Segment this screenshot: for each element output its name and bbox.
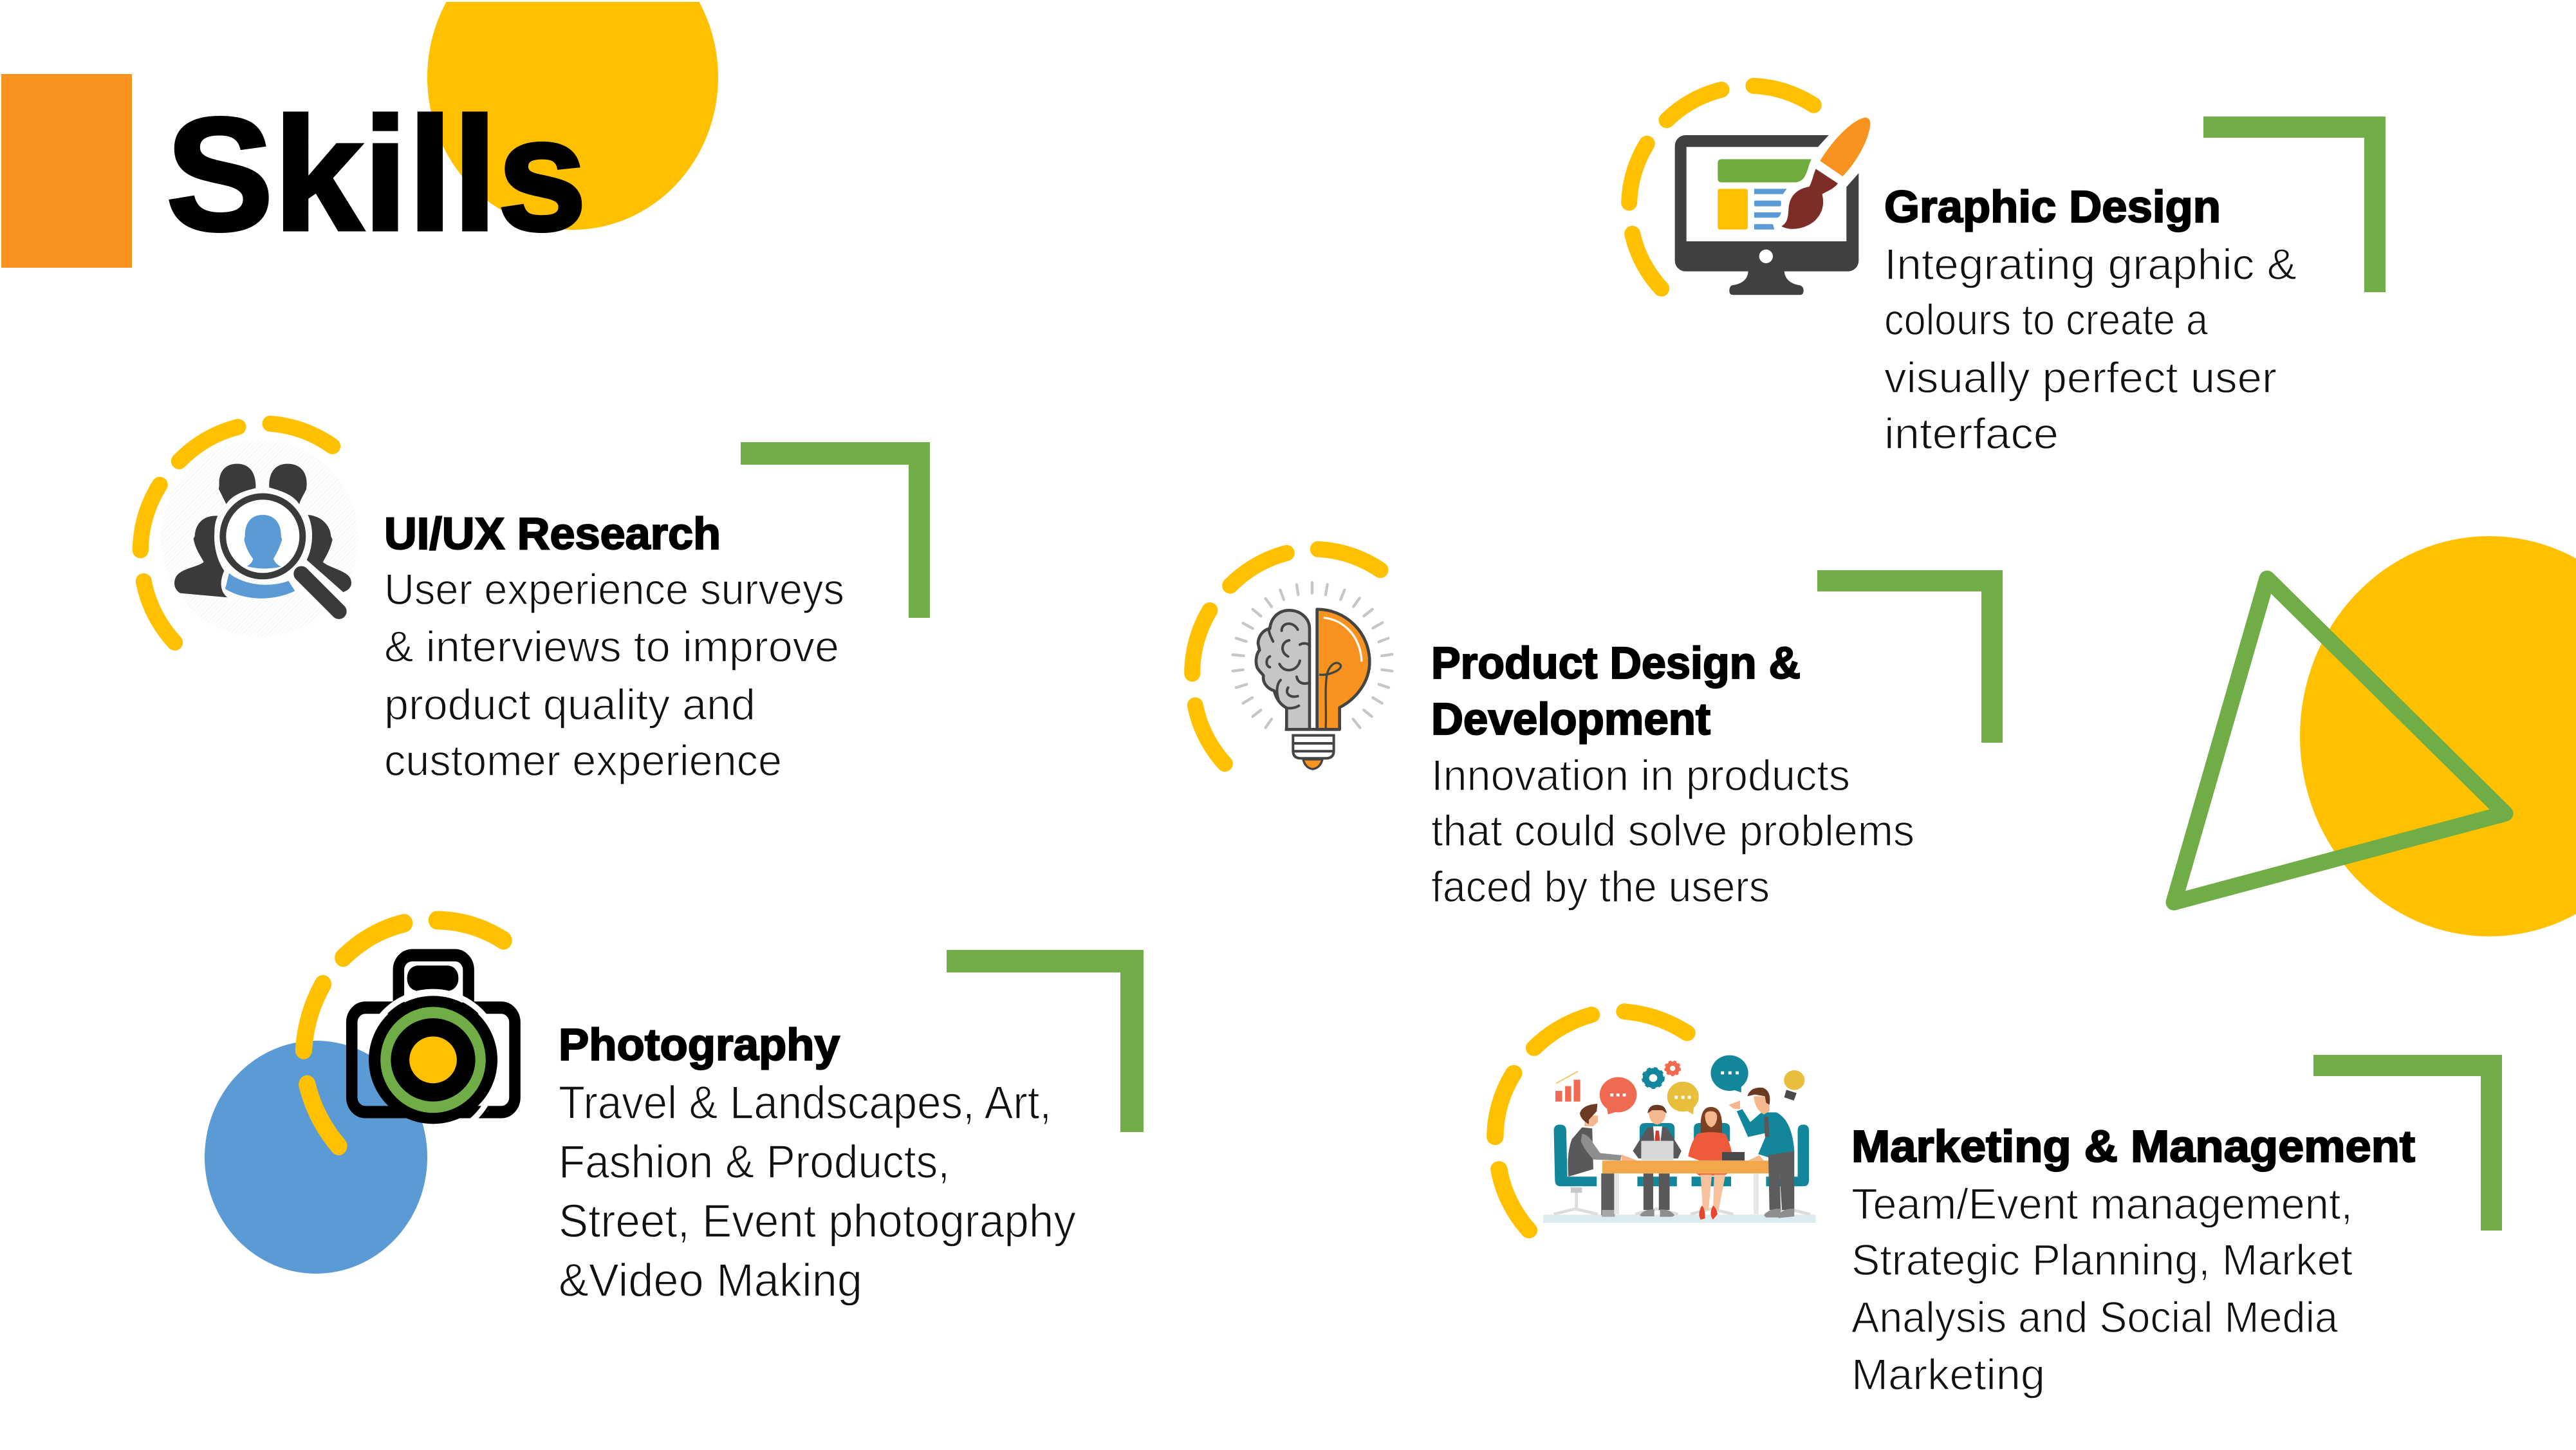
heading: Marketing & Management bbox=[1851, 1121, 2415, 1171]
description bbox=[1884, 240, 2297, 458]
chart bbox=[1555, 1080, 1580, 1102]
description: visually perfect user bbox=[1884, 353, 2277, 402]
decoration: right yellow circle bbox=[2300, 536, 2576, 936]
heading: Photography bbox=[559, 1019, 840, 1070]
description bbox=[1431, 751, 1914, 911]
green corner bracket bbox=[741, 442, 930, 618]
panel: Product Design & Development bbox=[1192, 549, 2003, 911]
description: Fashion & Products, bbox=[559, 1137, 950, 1188]
description bbox=[384, 565, 844, 785]
description: &Video Making bbox=[559, 1255, 862, 1306]
decoration: top yellow circle bbox=[427, 0, 718, 230]
description: Innovation in products bbox=[1431, 751, 1850, 800]
green corner bracket bbox=[2313, 1055, 2502, 1231]
heading: Graphic Design bbox=[1884, 181, 2221, 232]
panel: Photography bbox=[304, 920, 1144, 1306]
description: that could solve problems bbox=[1431, 806, 1914, 855]
chairs bbox=[1554, 1124, 1597, 1186]
heading: Development bbox=[1431, 694, 1710, 744]
description: Strategic Planning, Market bbox=[1851, 1236, 2353, 1285]
description: Travel & Landscapes, Art, bbox=[559, 1077, 1052, 1129]
panel: UI/UX Research bbox=[140, 423, 930, 785]
description: Street, Event photography bbox=[559, 1196, 1076, 1247]
description: & interviews to improve bbox=[384, 622, 839, 671]
icon: dashed ring and camera bbox=[304, 920, 515, 1146]
description: Team/Event management, bbox=[1851, 1180, 2353, 1229]
green corner bracket bbox=[1817, 570, 2003, 743]
decoration: green triangle bbox=[2174, 579, 2505, 902]
person 3 bbox=[1701, 1107, 1722, 1133]
heading: Product Design & bbox=[1431, 638, 1801, 688]
decoration: blue circle bbox=[205, 1041, 427, 1274]
decoration: orange square bbox=[1, 74, 132, 268]
description bbox=[1851, 1180, 2353, 1399]
panel: Graphic Design bbox=[1629, 86, 2386, 458]
green corner bracket bbox=[947, 950, 1144, 1132]
description: User experience surveys bbox=[384, 565, 844, 614]
title: Skills bbox=[166, 84, 587, 264]
table bbox=[1602, 1160, 1770, 1173]
panel: Marketing & Management bbox=[1495, 1012, 2502, 1399]
person 4 bbox=[1737, 1109, 1794, 1157]
description bbox=[559, 1077, 1076, 1306]
icon: dashed ring and team meeting bbox=[1495, 1012, 1816, 1231]
green corner bracket bbox=[2203, 116, 2386, 292]
heading bbox=[1431, 638, 1801, 744]
person 2 bbox=[1633, 1128, 1682, 1158]
icon: dashed ring and brain bulb bbox=[1192, 549, 1392, 769]
description: Integrating graphic & bbox=[1884, 240, 2297, 289]
heading: UI/UX Research bbox=[384, 508, 721, 559]
description: product quality and bbox=[384, 680, 755, 729]
icon: dashed ring and magnified users bbox=[140, 423, 358, 642]
description: customer experience bbox=[384, 736, 782, 785]
description: interface bbox=[1884, 409, 2059, 458]
description: faced by the users bbox=[1431, 862, 1770, 911]
description: colours to create a bbox=[1884, 295, 2208, 344]
person 1 bbox=[1601, 1173, 1615, 1215]
description: Marketing bbox=[1851, 1350, 2045, 1399]
description: Analysis and Social Media bbox=[1851, 1293, 2338, 1342]
icon: dashed ring and monitor with brush bbox=[1629, 86, 1870, 295]
